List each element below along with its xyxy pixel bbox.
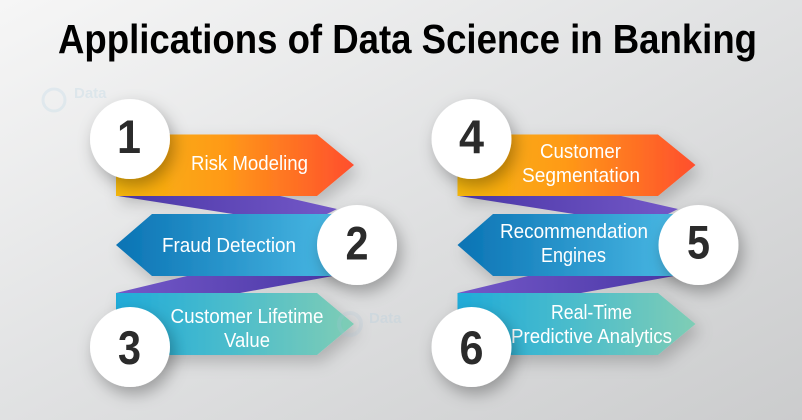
badge 3: 3 bbox=[118, 321, 141, 374]
arrow 4: Customer Segmentation bbox=[458, 134, 696, 196]
badge 3 bbox=[90, 307, 170, 387]
arrow 5: Recommendation Engines: Recommendation bbox=[500, 221, 648, 243]
arrow 6: Real-Time Predictive Analytics bbox=[458, 293, 696, 355]
panel: left column bbox=[90, 99, 402, 387]
badge 1: 1 bbox=[117, 110, 141, 163]
arrow 3: Customer Lifetime Value: Customer Lifetime bbox=[170, 306, 324, 328]
connector band 5 to 6 bbox=[458, 276, 674, 293]
connector band 4 to 5 bbox=[459, 196, 678, 214]
watermark: top left logo: Data bbox=[74, 85, 107, 102]
badge 5: 5 bbox=[687, 216, 710, 268]
badge 1 bbox=[90, 99, 170, 179]
arrow 2: Fraud Detection: Fraud Detection bbox=[162, 235, 296, 257]
arrow 1: Risk Modeling bbox=[116, 134, 354, 196]
connector band 2 to 3 bbox=[116, 276, 333, 293]
badge 2 bbox=[317, 205, 397, 285]
arrow 3: Customer Lifetime Value bbox=[116, 293, 354, 355]
badge 6 bbox=[432, 307, 512, 387]
badge 6: 6 bbox=[460, 321, 484, 374]
arrow 5: Recommendation Engines: Engines bbox=[541, 245, 606, 267]
arrow 2: Fraud Detection bbox=[116, 214, 340, 276]
watermark: top left logo bbox=[43, 85, 107, 111]
watermark: centre logo: Data bbox=[369, 310, 402, 327]
badge 5 bbox=[658, 205, 738, 285]
arrow 4: Customer Segmentation: Segmentation bbox=[522, 165, 640, 187]
arrow 6: Real-Time Predictive Analytics: Predictive Analytics bbox=[511, 326, 672, 348]
panel: right column bbox=[432, 99, 738, 387]
badge 2: 2 bbox=[346, 216, 368, 270]
connector band 1 to 2 bbox=[118, 196, 337, 214]
arrow 3: Customer Lifetime Value: Value bbox=[224, 330, 270, 352]
badge 4: 4 bbox=[459, 110, 484, 163]
arrow 5: Recommendation Engines bbox=[458, 214, 681, 276]
badge 4 bbox=[432, 99, 512, 179]
watermark: centre logo bbox=[339, 310, 402, 335]
arrow 4: Customer Segmentation: Customer bbox=[540, 141, 621, 163]
arrow 1: Risk Modeling: Risk Modeling bbox=[191, 153, 308, 175]
arrow 6: Real-Time Predictive Analytics: Real-Time bbox=[551, 302, 632, 324]
